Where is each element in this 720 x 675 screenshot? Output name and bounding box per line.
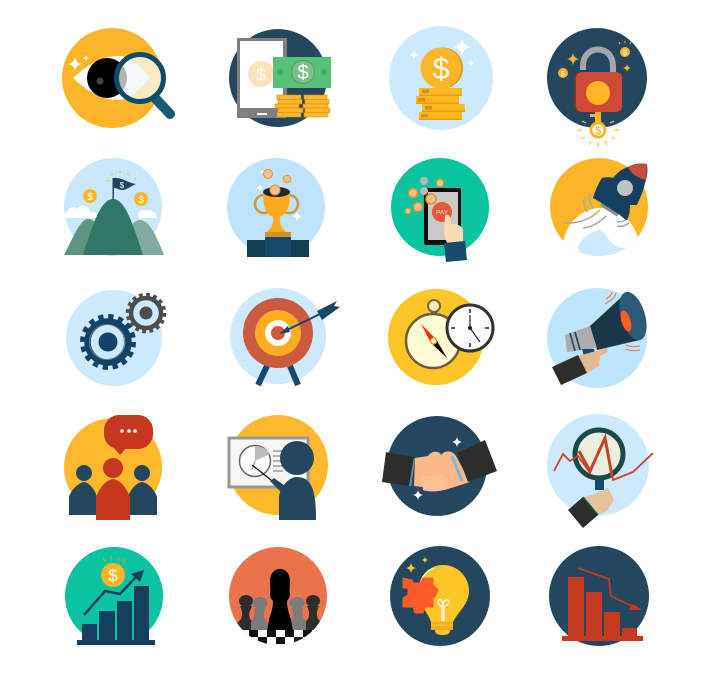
icon: padlock and key: $ xyxy=(595,125,601,137)
icon: chess pieces xyxy=(229,547,329,650)
icon: rocket launch xyxy=(550,158,648,256)
icon: tablet, banknote and coins: $ xyxy=(256,65,266,84)
icon: falling bar chart xyxy=(549,546,649,646)
icon grid xyxy=(62,26,654,646)
icon: compass and clock xyxy=(388,289,493,385)
icon: padlock and key: $ xyxy=(561,71,565,78)
icon: rising bar chart with coin: $ xyxy=(108,566,118,585)
icon: megaphone in hand xyxy=(547,288,652,388)
icon: target with arrow xyxy=(230,288,340,385)
icon: mountain with flag: $ xyxy=(120,181,125,190)
icon: handshake xyxy=(382,416,497,516)
icon: padlock and key: $ xyxy=(623,50,627,57)
icon: tablet payment: PAY xyxy=(436,210,449,216)
icon: coin stack: $ xyxy=(432,51,450,86)
icon: tablet payment xyxy=(391,158,489,262)
icon: team with speech bubble xyxy=(64,415,162,520)
icon: tablet, banknote and coins: $ xyxy=(297,62,309,84)
icon: magnifier on market chart xyxy=(547,414,653,528)
icon: mountain with flag: $ xyxy=(138,195,144,206)
icon: padlock and key xyxy=(547,28,647,147)
icon: tablet, banknote and coins xyxy=(229,29,331,127)
icon: gears xyxy=(66,290,164,386)
icon: mountain with flag: $ xyxy=(87,192,93,203)
icon: presenter at whiteboard xyxy=(228,415,328,520)
icon: mountain with flag xyxy=(63,158,164,256)
icon: coin stack xyxy=(389,26,493,130)
icon: rising bar chart with coin xyxy=(65,547,163,645)
icon: light bulb and puzzle piece xyxy=(390,546,490,646)
icon: trophy on podium xyxy=(227,158,325,257)
icon: eye and magnifier xyxy=(62,28,170,128)
